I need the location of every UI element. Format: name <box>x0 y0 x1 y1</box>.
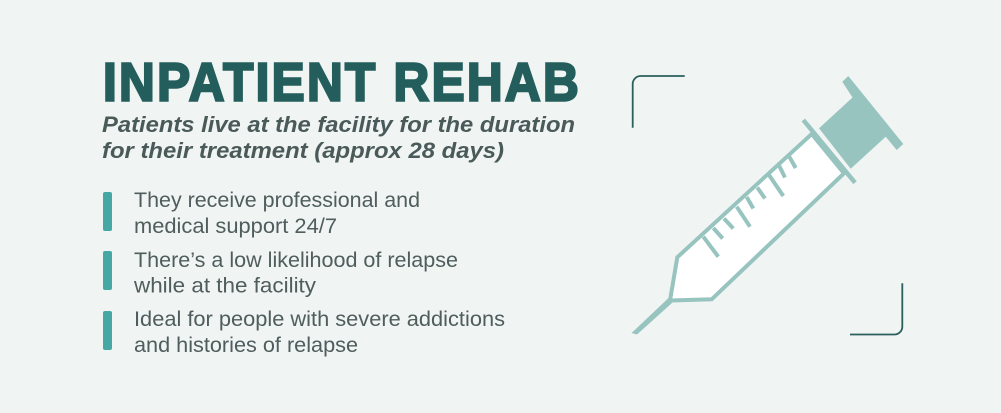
subtitle: for their treatment (approx 28 days) <box>102 138 504 163</box>
syringe collar <box>803 120 855 183</box>
bullet 1: medical support 24/7 <box>134 214 337 238</box>
bullet 3: Ideal for people with severe addictions <box>134 307 505 331</box>
syringe barrel <box>670 134 844 300</box>
syringe graduation ticks <box>703 157 796 257</box>
corner bracket: bottom right <box>850 283 902 334</box>
bullet 2 <box>103 248 458 298</box>
bullet 3: and histories of relapse <box>134 333 358 357</box>
bullet 1 <box>103 188 420 238</box>
syringe needle <box>632 298 672 334</box>
syringe plunger <box>819 76 903 169</box>
subtitle: Patients live at the facility for the duration <box>102 112 575 137</box>
bullet 3 <box>103 307 505 357</box>
icon: syringe <box>632 76 903 334</box>
bullet 2: There’s a low likelihood of relapse <box>134 248 458 272</box>
subtitle <box>102 112 575 163</box>
bullet 1: They receive professional and <box>134 188 420 212</box>
corner bracket: top left <box>633 76 685 128</box>
title: INPATIENT REHAB <box>103 53 581 113</box>
bullet 2: while at the facility <box>133 274 316 298</box>
